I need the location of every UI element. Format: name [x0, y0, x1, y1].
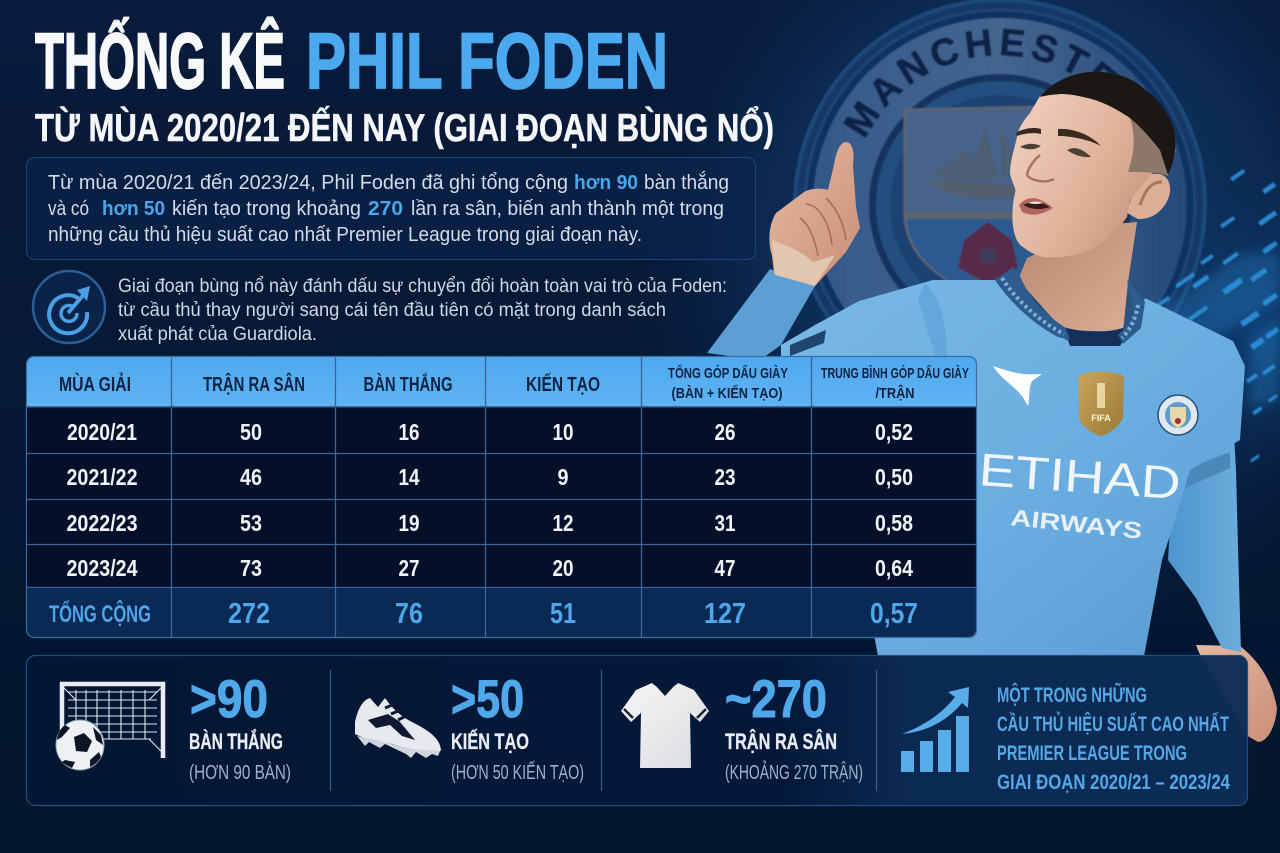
label: goals: BÀN THẮNG	[189, 729, 283, 754]
table row 2022/23: 0,58	[875, 510, 913, 536]
table row 2023/24: 47	[714, 555, 736, 581]
table row 2020/21: 16	[398, 419, 420, 445]
player ear	[1127, 174, 1170, 219]
table row 2022/23: 12	[552, 510, 574, 536]
note: goals: (HƠN 90 BÀN)	[189, 761, 291, 784]
icon: football boot	[355, 698, 441, 758]
line 1: Từ mùa 2020/21 đến 2023/24, Phil Foden đã ghi tổng cộng	[48, 172, 568, 194]
line 2: kiến tạo trong khoảng	[172, 198, 361, 220]
player raised hand	[769, 142, 860, 286]
sponsor: Etihad Airways: AIRWAYS	[1009, 504, 1143, 544]
line 2: lần ra sân, biến anh thành một trong	[411, 198, 724, 220]
player right arm sleeve	[1168, 400, 1241, 652]
player hair	[1040, 72, 1175, 175]
jersey shoulder fold	[918, 283, 947, 400]
icon: growth chart with arrow	[901, 687, 969, 772]
value: more than 50: >50	[451, 670, 524, 729]
table row 2023/24: 0,64	[875, 555, 913, 581]
table row 2021/22: 23	[714, 464, 736, 490]
stat: goals	[56, 670, 291, 784]
icon: goal and ball	[56, 684, 165, 770]
player eyes	[1020, 144, 1091, 157]
subtitle: TỪ MÙA 2020/21 ĐẾN NAY (GIAI ĐOẠN BÙNG NỔ)	[35, 105, 774, 150]
table row 2020/21: 26	[714, 419, 736, 445]
table total row: 0,57	[870, 598, 918, 630]
stat: assists	[355, 670, 584, 784]
player nose	[1027, 155, 1054, 181]
icon: target with arrow	[33, 271, 105, 343]
table total row: TỔNG CỘNG	[49, 600, 151, 628]
text: role change note	[118, 276, 727, 345]
player hair fade	[1128, 110, 1176, 176]
title blue part: PHIL FODEN	[306, 16, 668, 105]
table row 2022/23: 31	[714, 510, 736, 536]
player neck	[1018, 222, 1137, 332]
line 2: và có	[48, 198, 89, 220]
table header row: (BÀN + KIẾN TẠO)	[672, 385, 783, 402]
table row 2022/23: 2022/23	[66, 510, 138, 536]
line 3: những cầu thủ hiệu suất cao nhất Premier League trong giai đoạn này.	[48, 224, 642, 246]
badge: FIFA gold: FIFA	[1091, 413, 1111, 423]
line 2	[48, 198, 724, 220]
table row 2020/21: 0,52	[875, 419, 913, 445]
badge: FIFA gold	[1078, 372, 1124, 436]
table total row: 51	[550, 598, 576, 630]
player ear inner	[1140, 182, 1162, 205]
text: role change note: từ cầu thủ thay người sang cái tên đầu tiên có mặt trong danh sách	[118, 300, 666, 321]
table row 2023/24: 73	[240, 555, 262, 581]
player face	[1010, 90, 1165, 257]
title white part: THỐNG KÊ	[35, 16, 285, 105]
table row 2023/24: 20	[552, 555, 574, 581]
particles: blue light streaks	[1150, 169, 1280, 462]
table row 2021/22: 46	[240, 464, 262, 490]
table header row: /TRẬN	[876, 384, 914, 402]
table header row: BÀN THẮNG	[364, 372, 452, 396]
table total row: 76	[395, 598, 423, 630]
crest: Manchester City background	[792, 0, 1208, 340]
line 2: hơn 50	[102, 198, 165, 220]
table row 2020/21: 10	[552, 419, 574, 445]
table total row: 127	[704, 598, 746, 630]
line 1: hơn 90	[574, 172, 638, 194]
panel: summary paragraph	[26, 158, 756, 260]
note: appearances: (KHOẢNG 270 TRẬN)	[725, 761, 863, 784]
value: about 270: ~270	[725, 670, 827, 729]
sleeve band	[1185, 452, 1230, 488]
table header row: KIẾN TẠO	[526, 373, 600, 396]
badge: Manchester City	[1158, 395, 1198, 435]
note: assists: (HƠN 50 KIẾN TẠO)	[451, 761, 584, 784]
table row 2021/22: 14	[398, 464, 420, 490]
table row 2023/24: 2023/24	[66, 555, 138, 581]
table header row: TRUNG BÌNH GÓP DẤU GIÀY	[821, 364, 969, 382]
table: season statistics	[26, 356, 977, 638]
table header row: TRẬN RA SÂN	[203, 372, 305, 396]
table row 2020/21: 2020/21	[67, 419, 137, 445]
line 1: bàn thắng	[644, 171, 729, 194]
panel: key stats	[26, 656, 1248, 806]
jersey collar	[995, 267, 1145, 344]
player raised arm sleeve	[707, 269, 815, 360]
label: appearances: TRẬN RA SÂN	[725, 729, 837, 754]
jersey body	[781, 280, 1245, 656]
line 2: 270	[368, 198, 403, 220]
table row 2023/24: 27	[398, 555, 420, 581]
player: Phil Foden	[707, 72, 1277, 742]
table row 2022/23: 19	[398, 510, 420, 536]
player mouth	[1019, 198, 1053, 215]
text: top performer callout	[997, 683, 1230, 794]
sponsor: Etihad Airways	[977, 443, 1182, 544]
league patch	[790, 330, 826, 356]
title	[35, 16, 668, 105]
table total row: 272	[228, 598, 270, 630]
table row 2021/22: 0,50	[875, 464, 913, 490]
jersey inner collar	[1063, 318, 1135, 346]
table row 2020/21	[67, 419, 913, 445]
icon: white shirt	[621, 683, 709, 768]
value: more than 90: >90	[190, 670, 268, 729]
table row 2021/22	[66, 464, 913, 490]
table header row: MÙA GIẢI	[59, 372, 131, 396]
text: top performer callout: MỘT TRONG NHỮNG	[997, 683, 1147, 707]
table header row: TỔNG GÓP DẤU GIÀY	[668, 364, 788, 382]
wrist tape	[772, 240, 835, 286]
player right hand	[1196, 645, 1277, 742]
text: role change note: xuất phát của Guardiola.	[118, 324, 317, 345]
crest: Manchester City background: MANCHESTER	[842, 28, 1118, 138]
table row 2022/23: 53	[240, 510, 262, 536]
table header row	[59, 364, 969, 402]
sponsor: Etihad Airways: ETIHAD	[977, 443, 1182, 509]
label: assists: KIẾN TẠO	[451, 729, 529, 754]
table row 2021/22: 9	[558, 464, 568, 490]
table total row	[49, 598, 918, 630]
table row 2021/22: 2021/22	[66, 464, 138, 490]
text: top performer callout: PREMIER LEAGUE TRONG	[997, 742, 1187, 765]
table row 2020/21: 50	[240, 419, 262, 445]
table row 2023/24	[66, 555, 913, 581]
player eyebrows	[1016, 128, 1101, 146]
table row 2022/23	[66, 510, 913, 536]
finger lines	[800, 198, 846, 256]
logo: Puma	[993, 366, 1042, 406]
stat: appearances	[621, 670, 863, 784]
text: role change note: Giai đoạn bùng nổ này đánh dấu sự chuyển đổi hoàn toàn vai trò của Foden:	[118, 276, 727, 297]
